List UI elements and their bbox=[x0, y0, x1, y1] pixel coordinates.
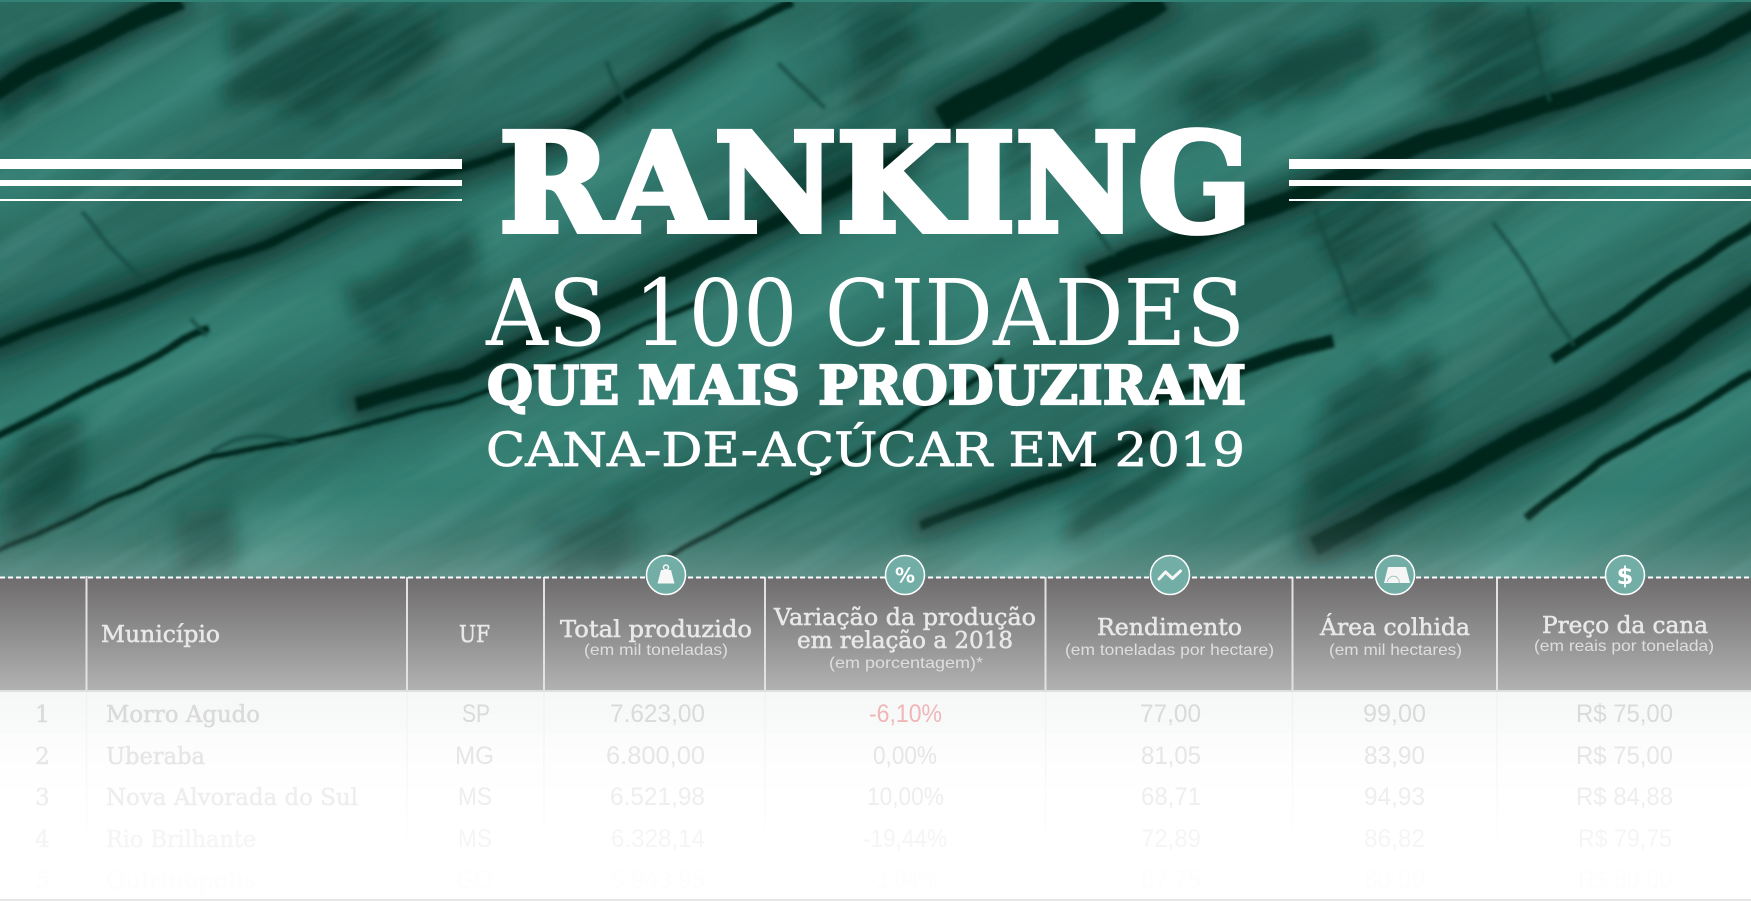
table row 2: 0,00% bbox=[873, 742, 937, 770]
table row 3: 3 bbox=[35, 785, 50, 811]
decorative title rules: right bbox=[1289, 159, 1751, 201]
table row 4: 86,82 bbox=[1364, 825, 1425, 853]
subtitle line 3: CANA-DE-AÇÚCAR EM 2019 bbox=[486, 422, 1245, 478]
table row 3: MS bbox=[458, 783, 492, 811]
table row 1: SP bbox=[462, 700, 490, 728]
header: Preço da cana: (em reais por tonelada) bbox=[1534, 638, 1714, 655]
header: Variação da produção: (em porcentagem)* bbox=[829, 655, 983, 672]
table row 3: 68,71 bbox=[1141, 783, 1201, 811]
icon: dollar: $ bbox=[1617, 562, 1633, 590]
header: Total produzido: Total produzido bbox=[560, 617, 752, 643]
table row 1: 77,00 bbox=[1140, 700, 1201, 728]
header: Variação da produção: em relação a 2018 bbox=[797, 628, 1013, 654]
table row 5: Quirinópolis bbox=[106, 868, 256, 894]
table header band bbox=[0, 578, 1751, 691]
table row 5: 5 bbox=[35, 868, 50, 894]
table row 5 bbox=[35, 866, 1672, 894]
column dividers in rows bbox=[86, 692, 1497, 850]
light stalk bodies bbox=[0, 40, 1751, 578]
table row 2: 83,90 bbox=[1364, 742, 1425, 770]
header: Área colhida bbox=[1319, 614, 1470, 659]
table row 2: R$ 75,00 bbox=[1576, 742, 1673, 770]
header: Município: Município bbox=[101, 622, 220, 648]
header bottom edge bbox=[0, 690, 1751, 692]
table row 2: 81,05 bbox=[1141, 742, 1201, 770]
table row 5: 5.943,95 bbox=[611, 866, 705, 894]
table row 1 bbox=[35, 700, 1673, 728]
header: Área colhida: (em mil hectares) bbox=[1329, 642, 1462, 659]
table rows background bbox=[0, 692, 1751, 901]
header: Total produzido: (em mil toneladas) bbox=[584, 642, 728, 659]
table row 3 bbox=[35, 783, 1673, 811]
stalk surface texture: dark fibres bbox=[0, 0, 1751, 578]
header: UF: UF bbox=[459, 622, 490, 648]
icon: percent: % bbox=[895, 564, 915, 588]
dark gaps between stalks bbox=[0, 4, 1751, 560]
icon: harvested area bbox=[1376, 556, 1414, 594]
bottom edge bbox=[0, 899, 1751, 901]
subtitle line 1: AS 100 CIDADES bbox=[485, 260, 1245, 367]
table row 3: 94,93 bbox=[1364, 783, 1425, 811]
table row 2: Uberaba bbox=[106, 744, 205, 770]
table row 5: 80,00 bbox=[1364, 866, 1425, 894]
table row 4 bbox=[35, 825, 1672, 853]
table row 1: 99,00 bbox=[1363, 700, 1426, 728]
subtitle line 2: QUE MAIS PRODUZIRAM bbox=[487, 355, 1246, 417]
table row 3: R$ 84,88 bbox=[1576, 783, 1673, 811]
table row 2: 2 bbox=[35, 744, 50, 770]
background photo: sugar cane stalks in teal duotone bbox=[0, 0, 1751, 578]
icon: dollar bbox=[1606, 556, 1644, 594]
table row 2: MG bbox=[455, 742, 494, 770]
table row 4: MS bbox=[458, 825, 492, 853]
table row 4: 4 bbox=[35, 827, 50, 853]
dark weathered blotches bbox=[0, 0, 1556, 578]
table row 1: 1 bbox=[35, 702, 50, 728]
table row 4: -19,44% bbox=[863, 825, 947, 853]
table row 5: -1,04% bbox=[870, 866, 937, 894]
dotted separator bbox=[0, 576, 1751, 578]
header: Área colhida: Área colhida bbox=[1319, 614, 1470, 641]
decorative title rules: left bbox=[0, 159, 462, 201]
header dividers bbox=[86, 576, 1497, 691]
table row 5: R$ 80,00 bbox=[1578, 866, 1672, 894]
header: Variação da produção: Variação da produção bbox=[773, 605, 1036, 631]
stalk nodes bbox=[80, 7, 1574, 453]
table row 5: GO bbox=[456, 866, 493, 894]
icon: trend line bbox=[1150, 556, 1190, 594]
title block bbox=[485, 104, 1252, 478]
table row 1: Morro Agudo bbox=[106, 702, 260, 728]
header: Preço da cana: Preço da cana bbox=[1542, 613, 1708, 639]
icon: percent bbox=[886, 556, 924, 594]
table row 4: Rio Brilhante bbox=[106, 827, 256, 853]
icon: weight bbox=[646, 556, 686, 594]
title: RANKING: RANKING bbox=[499, 104, 1252, 264]
table row 2 bbox=[35, 742, 1673, 770]
table row 3: 10,00% bbox=[867, 783, 944, 811]
column headers bbox=[101, 605, 1714, 672]
shadow along stalk edges bbox=[0, 4, 1751, 543]
table row 3: Nova Alvorada do Sul bbox=[106, 785, 358, 811]
table row 1: 7.623,00 bbox=[610, 700, 705, 728]
header: Preço da cana bbox=[1534, 613, 1714, 655]
header: Rendimento bbox=[1065, 615, 1274, 659]
table row 1: R$ 75,00 bbox=[1576, 700, 1673, 728]
table row 4: 6.328,14 bbox=[611, 825, 705, 853]
stalk surface texture: light fibres bbox=[0, 0, 1751, 578]
table row 4: R$ 79,75 bbox=[1578, 825, 1672, 853]
table row 5: 87,75 bbox=[1141, 866, 1201, 894]
header: Variação da produção bbox=[773, 605, 1036, 672]
table row 4: 72,89 bbox=[1141, 825, 1201, 853]
table row 1: -6,10% bbox=[869, 700, 942, 728]
table row 2: 6.800,00 bbox=[606, 742, 705, 770]
top teal strip bbox=[0, 0, 1751, 2]
header: Rendimento: Rendimento bbox=[1097, 615, 1242, 641]
table row 3: 6.521,98 bbox=[610, 783, 705, 811]
header: Total produzido bbox=[560, 617, 752, 659]
header: Rendimento: (em toneladas por hectare) bbox=[1065, 642, 1274, 659]
